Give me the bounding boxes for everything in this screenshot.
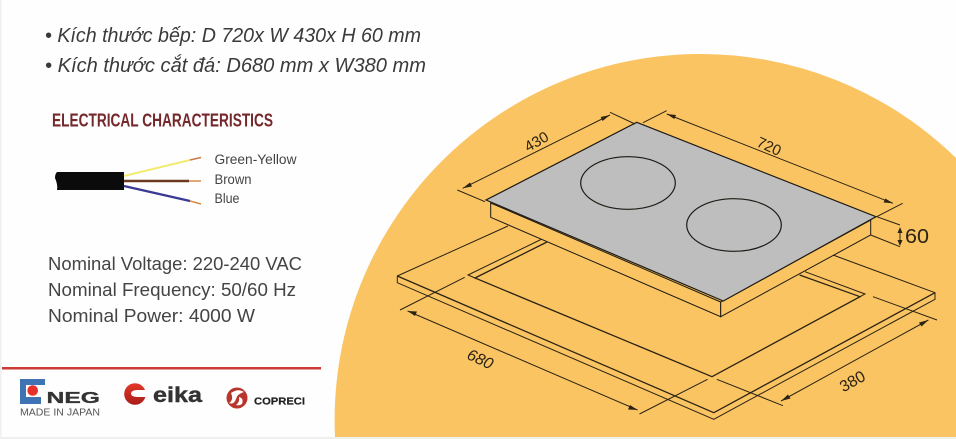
dimension: cooktop width 430: 430 — [522, 128, 552, 156]
icon: three-wire cable — [55, 158, 201, 204]
wire colour labels: Blue — [214, 191, 240, 206]
wire colour labels: Green-Yellow — [214, 152, 297, 167]
logo: Copreci: COPRECI — [254, 396, 305, 408]
dimension: cooktop width 430 — [457, 112, 635, 202]
dimension: cooktop height 60: 60 — [905, 226, 929, 248]
text block: nominal electrical values: Nominal Power: 4000 W — [48, 305, 256, 326]
dimension: cooktop depth 720 — [643, 111, 903, 217]
diagram: cooktop — [486, 122, 876, 317]
divider: red rule — [2, 367, 321, 370]
wire colour labels: Brown — [214, 172, 252, 187]
dimension: cut-out 680 — [400, 277, 708, 414]
text block: cooktop and cut-out sizes: • Kích thước bếp: D 720x W 430x H 60 mm — [45, 25, 421, 47]
dimension: cooktop depth 720: 720 — [754, 134, 784, 160]
text block: cooktop and cut-out sizes — [45, 25, 426, 77]
dimension: cut-out 380: 380 — [837, 368, 869, 396]
text block: cooktop and cut-out sizes: • Kích thước cắt đá: D680 mm x W380 mm — [45, 54, 426, 77]
logo: Copreci — [226, 388, 305, 408]
logo: eika: eika — [153, 384, 202, 407]
text block: nominal electrical values: Nominal Frequency: 50/60 Hz — [48, 279, 296, 300]
dimension: cut-out 380 — [717, 297, 937, 406]
panel: orange circular background — [335, 54, 956, 437]
dimension: cut-out 680: 680 — [464, 347, 496, 373]
logo: eika — [124, 383, 202, 407]
text block: nominal electrical values: Nominal Voltage: 220-240 VAC — [48, 253, 302, 274]
wire colour labels — [214, 152, 297, 206]
cooking zone: rear left — [581, 157, 675, 209]
diagram: countertop with cut-out — [397, 226, 935, 419]
logo: NEG made in Japan: MADE IN JAPAN — [20, 408, 100, 418]
text block: nominal electrical values — [48, 253, 302, 326]
logo: NEG made in Japan — [20, 379, 100, 418]
logo: NEG made in Japan: NEG — [46, 390, 100, 407]
dimension: cooktop height 60 — [871, 217, 929, 248]
heading: electrical characteristics: ELECTRICAL CHARACTERISTICS — [52, 110, 273, 130]
cooking zone: front right — [687, 199, 781, 251]
